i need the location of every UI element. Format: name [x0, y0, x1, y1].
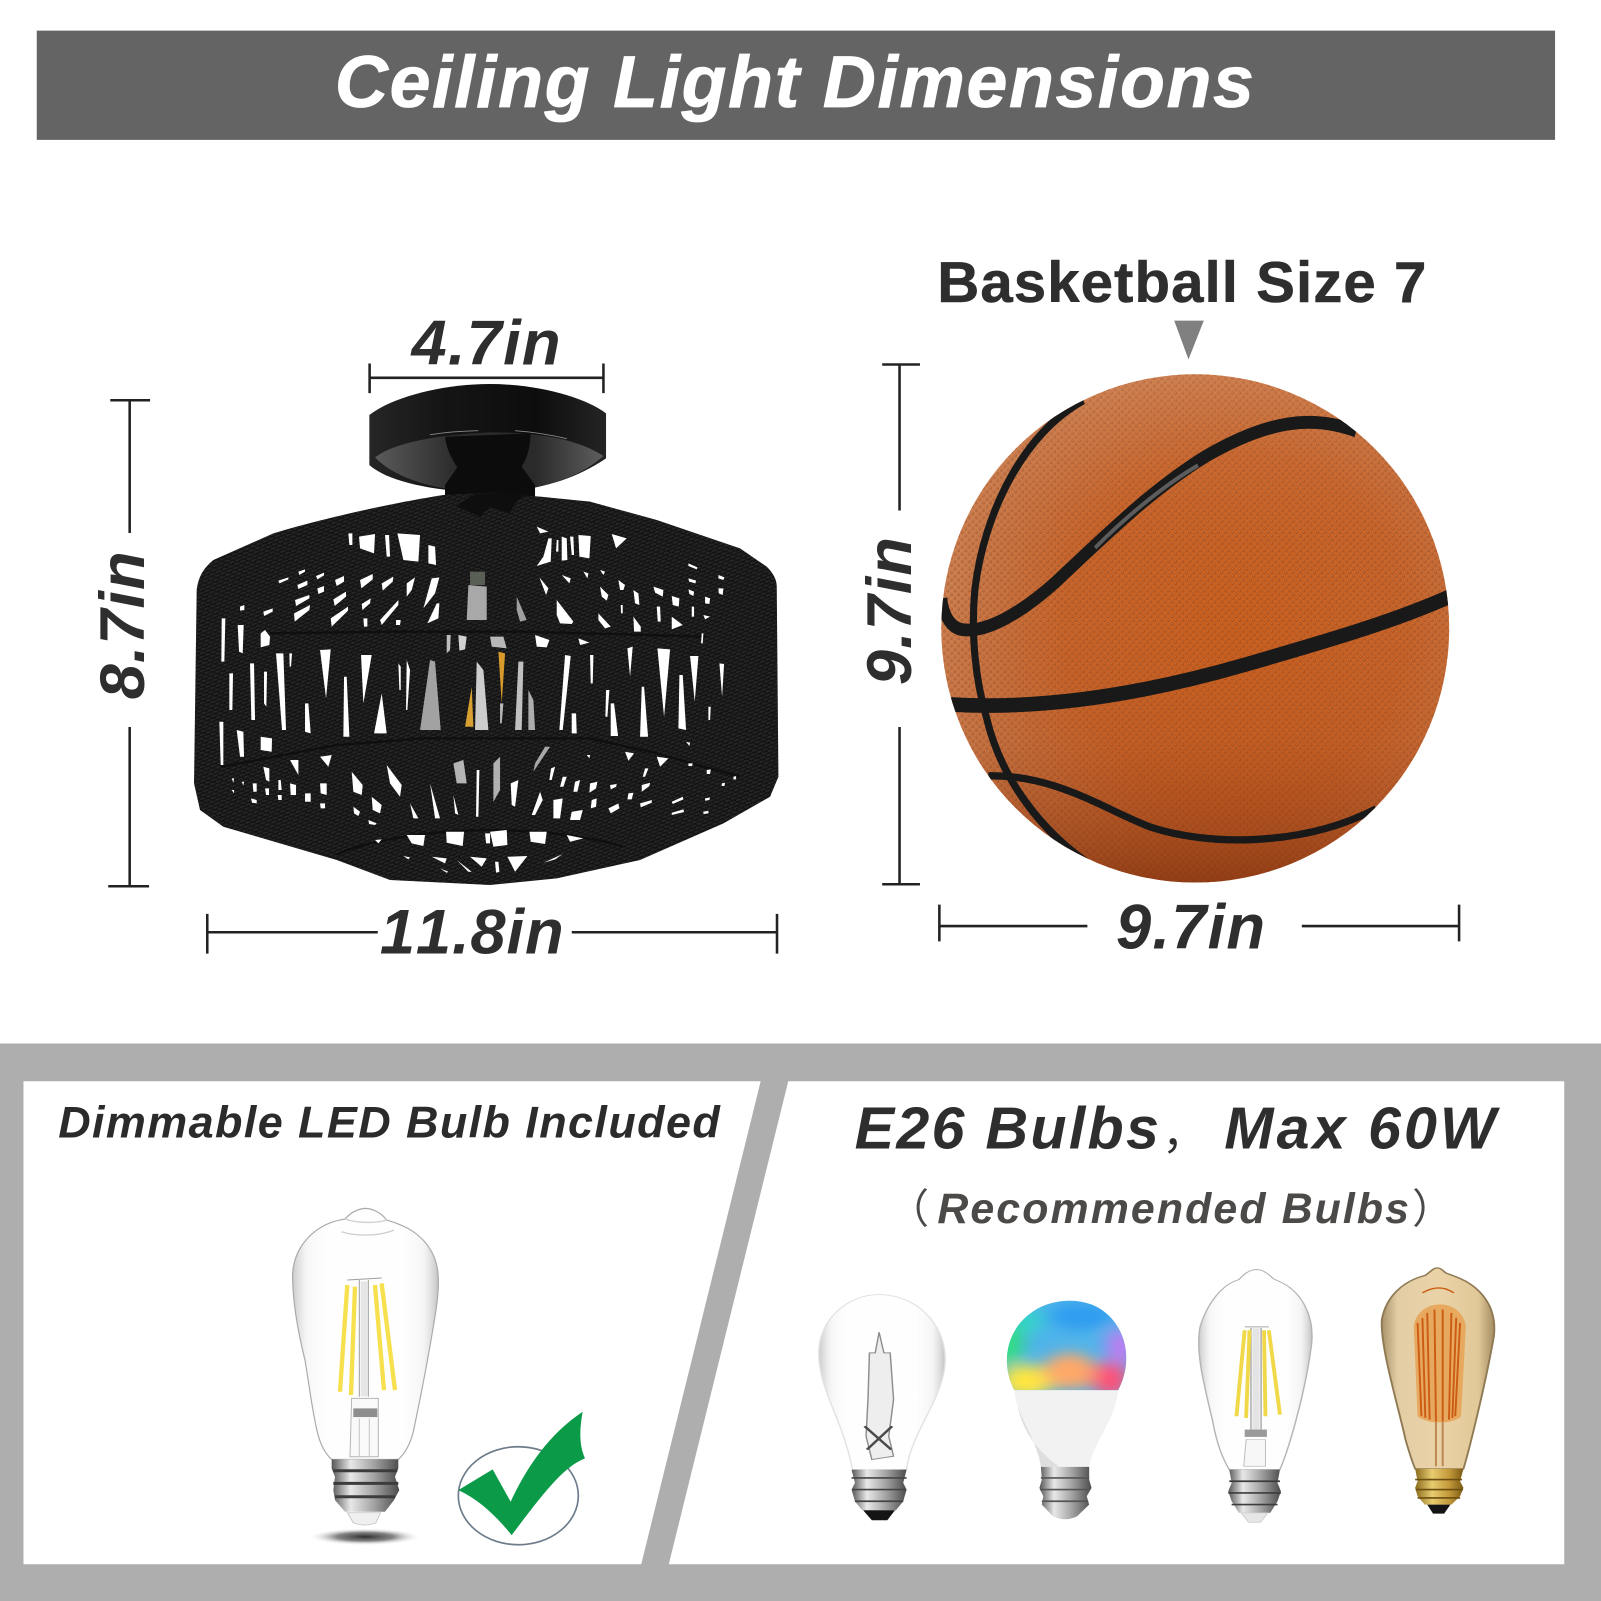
- title: Ceiling Light Dimensions: [335, 40, 1254, 123]
- dimension: 8.7in height: [88, 400, 158, 886]
- dimension: 9.7in height: [855, 365, 925, 884]
- dimension: 11.8in width: [207, 898, 777, 968]
- weave seam lines: [222, 632, 740, 855]
- panel subheading: ）: [1412, 1186, 1453, 1232]
- lamp canopy: [369, 384, 606, 502]
- panel heading: Max 60W: [1224, 1095, 1501, 1162]
- panel heading: [855, 1095, 1501, 1162]
- panel heading: E26 Bulbs: [855, 1095, 1159, 1162]
- dimension: 9.7in width: [939, 893, 1459, 963]
- bulb: RGB colour smart bulb: [1006, 1300, 1126, 1520]
- basketball: [941, 374, 1451, 883]
- included ST64 bulb: [293, 1208, 438, 1545]
- icon: green check mark: [458, 1412, 585, 1545]
- seam highlight: [1095, 465, 1198, 548]
- panel subheading: Recommended Bulbs: [937, 1185, 1409, 1233]
- right half of weave gaps: [490, 527, 736, 873]
- arrow pointing at basketball: [1174, 321, 1204, 359]
- header banner: [37, 31, 1555, 140]
- left half of weave gaps: [219, 533, 490, 873]
- seam: middle band: [951, 596, 1451, 706]
- panel: dimmable LED bulb included: [23, 1081, 761, 1564]
- panel heading: ，: [1162, 1108, 1207, 1159]
- rope knot under the canopy: [457, 493, 530, 517]
- glimpse of bulb through left half: [420, 572, 488, 783]
- bulb: clear LED filament ST bulb: [1199, 1270, 1312, 1522]
- dimension: 11.8in width: 11.8in: [380, 898, 564, 968]
- panel: recommended E26 bulbs: [669, 1081, 1564, 1564]
- dimension: 9.7in width: 9.7in: [1116, 893, 1265, 963]
- seam: lower curve: [988, 776, 1376, 840]
- right half of the shade: [490, 527, 736, 873]
- panel subheading: （: [888, 1186, 929, 1232]
- seam: left arc: [973, 400, 1095, 868]
- seam: upper swoop: [942, 422, 1356, 630]
- bulb: clear halogen A-shape: [819, 1295, 945, 1520]
- panel: ceiling light with dimensions: [88, 309, 778, 968]
- woven rope lamp shade: [194, 493, 778, 885]
- glimpse of bulb through right half: [490, 597, 550, 802]
- bulb: amber vintage Edison bulb: [1382, 1268, 1494, 1514]
- dimension: 8.7in height: 8.7in: [88, 551, 158, 699]
- panel heading: Dimmable LED Bulb Included: [58, 1096, 721, 1147]
- dimension: 4.7in canopy width: [370, 309, 603, 393]
- panel: basketball size comparison: [855, 251, 1459, 963]
- dimension: 4.7in canopy width: 4.7in: [409, 309, 561, 379]
- dimension: 9.7in height: 9.7in: [855, 537, 925, 685]
- bottom band: [0, 1044, 1601, 1601]
- basketball label: Basketball Size 7: [937, 251, 1427, 315]
